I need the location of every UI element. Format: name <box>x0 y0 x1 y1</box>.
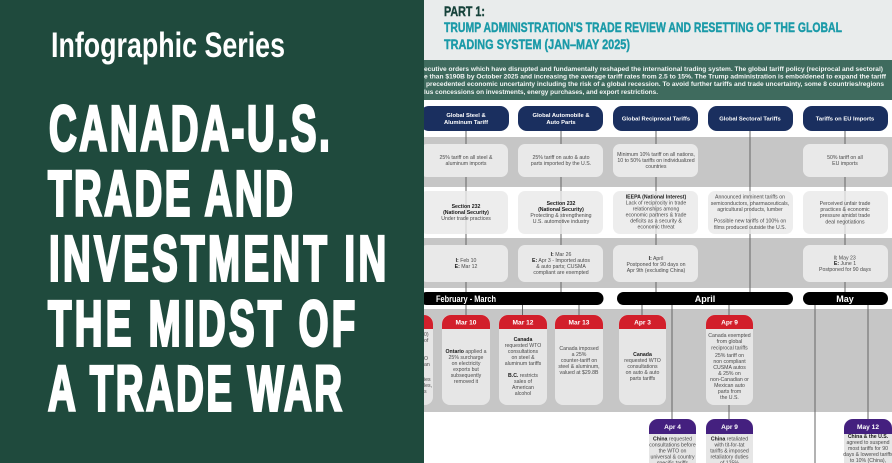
main title: INVESTMENT IN <box>49 224 386 295</box>
row: legal basis and rationale: pressure amidst trade <box>820 213 870 219</box>
card: Apr 4 <box>649 419 696 463</box>
card: Apr 9: non compliant <box>713 359 746 365</box>
row: legal basis and rationale: (National Security) <box>443 210 489 216</box>
row: implementation dates: Apr 9th (excluding China) <box>627 268 686 274</box>
month: February - March: February - March <box>436 294 496 304</box>
row: implementation dates: & auto parts; CUSMA <box>536 264 586 270</box>
card: Apr 4: the WTO on <box>659 448 687 454</box>
card: Mar 12: Mar 12 <box>513 320 534 326</box>
card: partially cropped event: les, <box>424 383 432 389</box>
card: Apr 9 China: tariffs & imposed <box>710 448 749 454</box>
intro text band: e than $190B by October 2025 and increasing the average tariff rates from 2.5 to 15%. The Trump administration is emboldened to expand the tariff <box>424 74 887 80</box>
card: Mar 13: Canada imposed <box>559 346 599 352</box>
card: Mar 12 <box>499 315 547 405</box>
card: Apr 9: & 25% on <box>718 371 741 377</box>
card: May 12: days & lowered tariffs <box>843 452 892 458</box>
row: tariff measures <box>420 144 888 177</box>
row: tariff measures: 25% tariff on all steel & <box>440 155 493 161</box>
card: Mar 13: steel & aluminum, <box>558 364 600 370</box>
row: legal basis and rationale: agricultural products, lumber <box>717 207 783 213</box>
card: Mar 12: Canada <box>514 337 532 343</box>
card: Mar 10: Ontario applied a <box>446 349 487 355</box>
connector lines <box>466 131 868 463</box>
card: May 12 <box>843 419 892 463</box>
panel: right infographic <box>410 0 892 463</box>
card: Apr 9: reciprocal tariffs <box>711 346 748 352</box>
card: Apr 9: Canada exempted <box>708 333 751 339</box>
header: steel <box>420 106 509 131</box>
row: tariff measures: countries <box>645 164 667 170</box>
card: Apr 9: CUSMA autos <box>713 365 746 371</box>
row: legal basis and rationale: U.S. automotive industry <box>533 219 590 225</box>
card: partially cropped event: ies <box>424 377 431 383</box>
card: Apr 3: requested WTO <box>624 358 661 364</box>
card: Apr 9 China <box>706 419 753 463</box>
card: Apr 3: parts tariffs <box>630 376 656 382</box>
row: implementation dates: E: Mar 12 <box>455 264 477 270</box>
card: Mar 12: sales of <box>514 379 532 385</box>
card: Apr 3 <box>619 315 666 405</box>
card: partially cropped event: of <box>424 338 429 344</box>
intro text band: ecutive orders which have disrupted and fundamentally reshaped the international trading system. The global tariff policy (reciprocal and sectoral) <box>424 66 883 73</box>
card: Mar 12: requested WTO <box>505 343 541 349</box>
part label: PART 1: <box>444 3 485 19</box>
card: May 12: most tariffs for 90 <box>848 446 888 452</box>
card: Apr 9 <box>706 315 753 405</box>
card: partially cropped event: O <box>424 356 428 362</box>
main title <box>48 94 386 425</box>
month: February - March <box>420 292 604 305</box>
row: legal basis and rationale: semiconductors, pharmaceuticals, <box>711 201 789 207</box>
row: legal basis and rationale: economic partners & trade <box>626 212 687 218</box>
row: implementation dates: compliant are exempted <box>533 270 589 276</box>
row: tariff measures: 10 to 50% tariffs on individualized <box>617 158 695 164</box>
header: steel: Aluminum Tariff <box>444 120 488 126</box>
card: partially cropped event <box>424 315 433 405</box>
card: Mar 10: exports but <box>453 367 479 373</box>
card: May 12: China & the U.S. <box>848 434 889 440</box>
card: Mar 12: B.C. restricts <box>508 373 538 379</box>
card: Mar 10: on electricity <box>452 361 481 367</box>
header: sectoral: Global Sectoral Tariffs <box>719 116 781 122</box>
header: EU <box>803 106 888 131</box>
card: Apr 9 China: China retaliated <box>711 436 748 442</box>
intro text band: precedented economic uncertainty including the risk of a global recession. To avoid further tariffs and trade uncertainty, some 8 countries/regions <box>426 81 884 88</box>
row: tariff measures: 25% tariff on auto & auto <box>532 155 590 161</box>
header: auto <box>518 106 603 131</box>
card: Apr 4: consultations before <box>649 442 696 448</box>
card: Mar 13: valued at $29.8B <box>560 370 599 376</box>
row: implementation dates: I: Mar 26 <box>551 252 571 258</box>
card: Mar 13: Mar 13 <box>569 320 590 326</box>
card: May 12: May 12 <box>857 424 879 431</box>
card: Apr 3: Apr 3 <box>634 320 651 326</box>
card: May 12: agreed to suspend <box>847 440 890 446</box>
row: legal basis and rationale: Protecting & strengthening <box>530 213 592 219</box>
card: partially cropped event: s <box>424 389 427 395</box>
card: Apr 9 China: Apr 9 <box>721 424 738 431</box>
tariff type headers <box>420 106 888 131</box>
row: legal basis and rationale: relationships among <box>633 206 679 212</box>
card: Apr 4: universal & country <box>650 454 695 460</box>
row: legal basis and rationale: practices & economic <box>820 207 870 213</box>
grey row bands <box>424 137 892 412</box>
card: Mar 10: Mar 10 <box>456 320 477 326</box>
main title: A TRADE WAR <box>48 354 342 425</box>
China event cards <box>649 419 892 463</box>
row: implementation dates: E: Apr 3 - Imported autos <box>532 258 590 264</box>
header band <box>424 0 892 60</box>
card: Mar 12: aluminum tariffs <box>505 361 542 367</box>
row: tariff measures: EU imports <box>832 161 858 167</box>
card: Apr 9: the U.S. <box>720 395 739 401</box>
card: Apr 9 China: with tit-for-tat <box>715 442 745 448</box>
card: Mar 13: counter-tariff on <box>561 358 597 364</box>
card: partially cropped event: an <box>424 362 430 368</box>
card: Mar 12: consultations <box>508 349 539 355</box>
row: legal basis and rationale: Section 232 <box>547 201 576 207</box>
header: auto: Global Automobile & <box>532 113 590 119</box>
part heading <box>444 19 842 52</box>
row: legal basis and rationale: IEEPA (National Interest) <box>626 194 687 200</box>
row: legal basis and rationale: Possible new tariffs of 100% on <box>714 218 786 224</box>
panel: left title panel <box>0 0 424 463</box>
row: legal basis and rationale: (National Security) <box>538 207 584 213</box>
card: Apr 9: parts from <box>718 389 741 395</box>
row: implementation dates: E: June 1 <box>834 261 856 267</box>
card: partially cropped event: 0) <box>424 332 429 338</box>
row: legal basis and rationale: Perceived unfair trade <box>820 201 870 207</box>
card: Mar 10: subsequently <box>451 373 482 379</box>
card: Apr 9: 25% tariff on <box>715 353 744 359</box>
row: tariff measures: 50% tariff on all <box>827 155 863 161</box>
row: implementation dates: Postponed for 90 days on <box>626 262 686 268</box>
card: Apr 9: Apr 9 <box>721 320 738 326</box>
card: Apr 3: on auto & auto <box>626 370 659 376</box>
row: implementation dates <box>420 245 888 282</box>
month: April: April <box>695 294 715 304</box>
card: Mar 10 <box>442 315 490 405</box>
card: Apr 4: China requested <box>653 436 692 442</box>
month: April <box>617 292 793 305</box>
intro text band: lus concessions on investments, energy purchases, and export restrictions. <box>424 89 658 96</box>
card: Mar 10: 25% surcharge <box>449 355 484 361</box>
row: legal basis and rationale: films produced outside the U.S. <box>714 225 786 231</box>
series label: Infographic Series <box>51 26 285 65</box>
card: Apr 3: consultations <box>627 364 658 370</box>
card: Apr 9: non-Canadian or <box>710 377 749 383</box>
header: reciprocal <box>613 106 698 131</box>
row: legal basis and rationale: economic threat <box>638 224 675 230</box>
card: Apr 9: from global <box>717 339 742 345</box>
card: Apr 9: Mexican auto <box>714 383 745 389</box>
header: EU: Tariffs on EU Imports <box>816 116 874 122</box>
row: legal basis and rationale: deal negotiations <box>825 220 865 226</box>
row: legal basis and rationale: Under trade practices <box>441 216 491 222</box>
row: legal basis and rationale: deficits as a security & <box>630 218 682 224</box>
row: legal basis and rationale <box>420 191 888 234</box>
row: legal basis and rationale: Announced imminent tariffs on <box>715 194 785 200</box>
row: legal basis and rationale: Section 232 <box>452 204 481 210</box>
header: auto: Auto Parts <box>546 120 576 126</box>
main title: TRADE AND <box>48 159 293 230</box>
row: tariff measures: aluminum imports <box>446 161 487 167</box>
card: Mar 12: American <box>512 385 534 391</box>
intro text band <box>424 60 892 100</box>
card: Mar 13: a 25% <box>572 352 587 358</box>
row: implementation dates: I: April <box>649 256 663 262</box>
row: implementation dates: Postponed for 90 days <box>819 267 871 273</box>
card: Mar 12: on steel & <box>511 355 535 361</box>
row: legal basis and rationale: Lack of reciprocity in trade <box>626 200 686 206</box>
Canada event cards <box>410 315 753 405</box>
row: implementation dates: I: Feb 10 <box>456 258 476 264</box>
month timeline bars <box>420 292 888 305</box>
part heading: TRADING SYSTEM (JAN–MAY 2025) <box>444 36 630 52</box>
card: Mar 13 <box>555 315 603 405</box>
card: Apr 9 China: retaliatory duties <box>710 454 749 460</box>
main title: THE MIDST OF <box>48 289 355 360</box>
main title: CANADA-U.S. <box>49 94 330 165</box>
row: tariff measures: parts imported by the U.S. <box>531 161 591 167</box>
header: sectoral <box>708 106 793 131</box>
row: tariff measures: Minimum 10% tariff on all nations, <box>617 152 695 158</box>
card: Apr 4: Apr 4 <box>664 424 681 431</box>
card: Mar 10: removed it <box>454 379 479 385</box>
card: Apr 3: Canada <box>633 352 652 358</box>
row: implementation dates: I: May 23 <box>834 256 856 262</box>
header: steel: Global Steel & <box>446 113 486 119</box>
month: May <box>803 292 888 305</box>
month: May: May <box>836 294 854 304</box>
header: reciprocal: Global Reciprocal Tariffs <box>622 116 690 122</box>
card: Mar 12: alcohol <box>515 391 531 397</box>
